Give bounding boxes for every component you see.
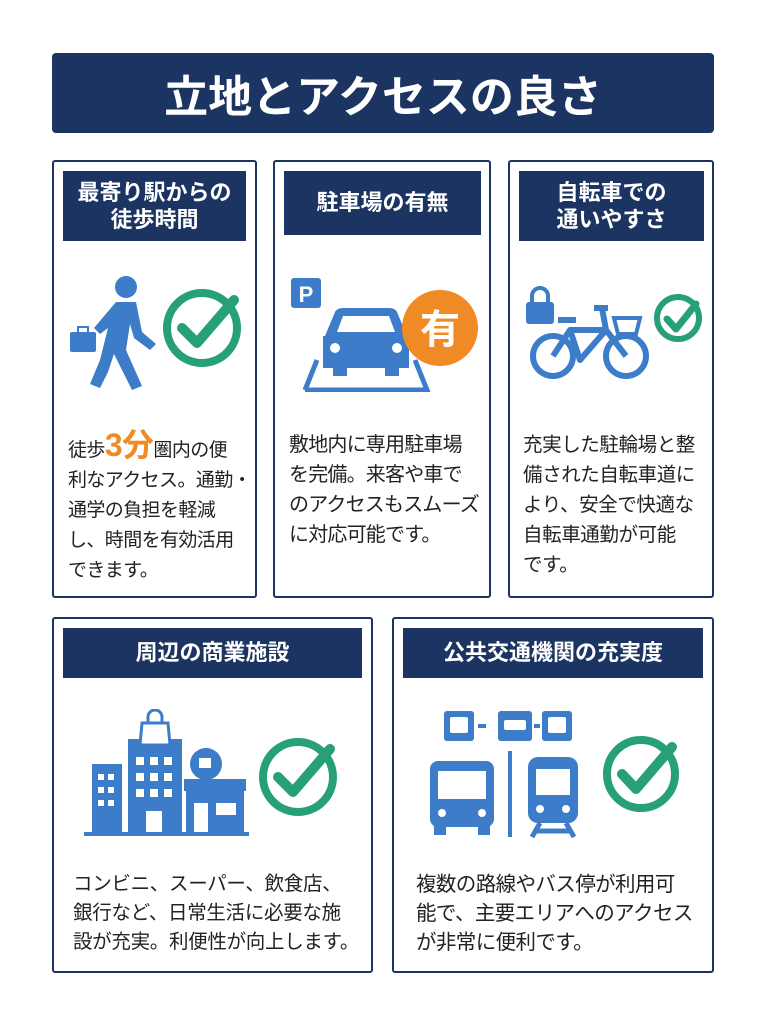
text: transport: 能で、主要エリアへのアクセス <box>416 902 693 925</box>
panel: bicycle <box>508 160 714 598</box>
text: parking <box>289 434 479 546</box>
text: transport <box>416 873 693 954</box>
text: bicycle: より、安全で快適な <box>523 494 694 516</box>
text: bicycle: 充実した駐輪場と整 <box>523 434 695 456</box>
heading: walking <box>63 171 246 241</box>
text: parking: 敷地内に専用駐車場 <box>289 434 462 456</box>
text: bicycle: です。 <box>523 554 578 576</box>
heading: bicycle: 自転車での <box>556 180 666 204</box>
icon: bus and train with check <box>430 711 679 838</box>
text: commercial <box>73 873 359 953</box>
icon: parking car with 有: 有 <box>420 297 460 355</box>
text: transport: 複数の路線やバス停が利用可 <box>416 873 675 896</box>
text: bicycle <box>523 434 695 576</box>
heading: walking: 徒歩時間 <box>110 207 198 232</box>
title <box>52 53 714 133</box>
heading: commercial: 周辺の商業施設 <box>135 640 290 665</box>
text: parking: に対応可能です。 <box>289 524 441 546</box>
text: walking: できます。 <box>68 560 158 581</box>
text: walking: し、時間を有効活用 <box>68 530 234 551</box>
text: bicycle: 備された自転車道に <box>523 464 695 486</box>
text: parking: を完備。来客や車で <box>289 464 462 486</box>
text: walking: 利なアクセス。通勤・ <box>68 470 251 491</box>
panel: commercial <box>52 617 373 973</box>
icon: parking car with 有 <box>291 278 478 392</box>
text: commercial: 設が充実。利便性が向上します。 <box>73 931 359 953</box>
panel: public transport <box>392 617 714 973</box>
title: 立地とアクセスの良さ <box>164 73 602 122</box>
icon: parking car with 有: P <box>299 282 313 307</box>
text: transport: が非常に便利です。 <box>416 931 593 954</box>
heading: walking: 最寄り駅からの <box>77 180 232 204</box>
heading: parking: 駐車場の有無 <box>316 190 448 215</box>
text: commercial: コンビニ、スーパー、飲食店、 <box>73 873 341 895</box>
text: walking: 通学の負担を軽減 <box>68 500 215 521</box>
heading: commercial <box>63 628 362 678</box>
panel: walking time <box>52 160 257 598</box>
text: parking: のアクセスもスムーズ <box>289 494 479 516</box>
heading: bicycle: 通いやすさ <box>556 207 666 232</box>
icon: buildings with check <box>84 709 337 836</box>
heading: bicycle <box>519 171 704 241</box>
heading: parking <box>284 171 481 235</box>
text: bicycle: 自転車通勤が可能 <box>523 524 676 546</box>
heading: transport <box>403 628 703 678</box>
panel: parking <box>273 160 491 598</box>
text: commercial: 銀行など、日常生活に必要な施 <box>73 902 341 924</box>
icon: walking person with check <box>70 276 241 390</box>
icon: bicycle with lock and check <box>526 286 702 379</box>
text: walking: 徒歩3分圏内の便 <box>68 427 227 463</box>
text: walking <box>68 427 251 581</box>
heading: transport: 公共交通機関の充実度 <box>443 640 663 665</box>
